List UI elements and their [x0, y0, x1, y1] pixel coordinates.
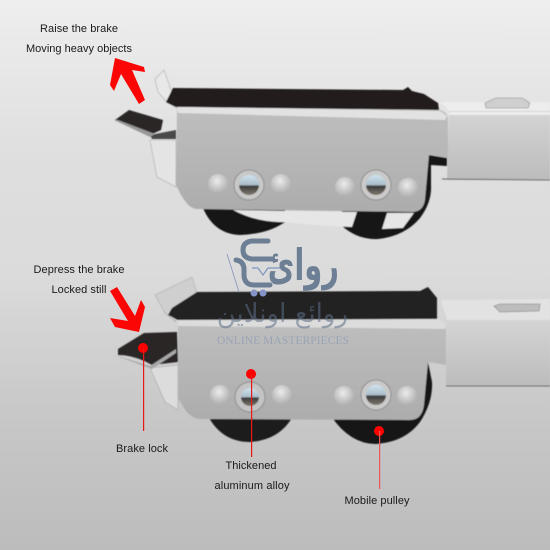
right pulley wheel [342, 155, 447, 239]
callout: thickened aluminum alloy: Thickened [226, 460, 276, 472]
callout: thickened aluminum alloy [214, 369, 290, 492]
raised brake caster [114, 70, 550, 239]
raised foot flap [155, 70, 177, 108]
brake pedal [118, 332, 178, 365]
watermark logo [217, 240, 349, 347]
axle eyelet left [234, 170, 264, 200]
brake pedal [115, 110, 163, 135]
square tube [440, 102, 550, 111]
raised foot flap [155, 277, 197, 322]
rivets [208, 174, 228, 194]
rubber pad [166, 87, 439, 110]
callout: thickened aluminum alloy: aluminum alloy [214, 480, 290, 492]
white hub inserts [233, 210, 414, 229]
logo wordmark: روائ [268, 240, 339, 291]
axle eyelet right [361, 380, 391, 410]
heading: depress the brake: Depress the brake [34, 264, 124, 276]
rivets [210, 385, 230, 405]
heading: raise the brake: Raise the brake [40, 23, 118, 35]
callout: brake lock: Brake lock [116, 443, 168, 455]
logo cart mark [236, 241, 272, 285]
axle eyelet left [235, 382, 265, 412]
square tube [441, 299, 550, 320]
callout: mobile pulley [344, 426, 410, 507]
depressed brake caster [114, 277, 550, 444]
heading: depress the brake: Locked still [52, 284, 106, 296]
watermark latin line: ONLINE MASTERPIECES [217, 335, 349, 347]
heading: depress the brake [34, 264, 124, 296]
brake arm [150, 130, 176, 139]
arrow: raise brake [110, 58, 145, 104]
arrow: depress brake [110, 287, 145, 332]
left pulley wheel [203, 208, 285, 235]
rubber pad [168, 287, 437, 320]
brake base plate [150, 140, 176, 187]
watermark arabic line: روائع اونلاين [217, 299, 348, 329]
callout: brake lock [116, 343, 168, 455]
heading: raise the brake [26, 23, 132, 55]
logo cart handle [227, 254, 239, 292]
axle eyelet right [361, 170, 391, 200]
side plate [176, 107, 448, 212]
logo cart tick [252, 268, 280, 275]
right pulley wheel [331, 362, 432, 444]
callout: mobile pulley: Mobile pulley [344, 495, 410, 507]
top nut [485, 98, 530, 108]
side plate [178, 321, 446, 420]
left pulley wheel [208, 416, 293, 442]
brake base plate [150, 365, 178, 410]
heading: raise the brake: Moving heavy objects [26, 43, 132, 55]
logo cart wheels [250, 290, 266, 296]
top nut [494, 304, 540, 312]
